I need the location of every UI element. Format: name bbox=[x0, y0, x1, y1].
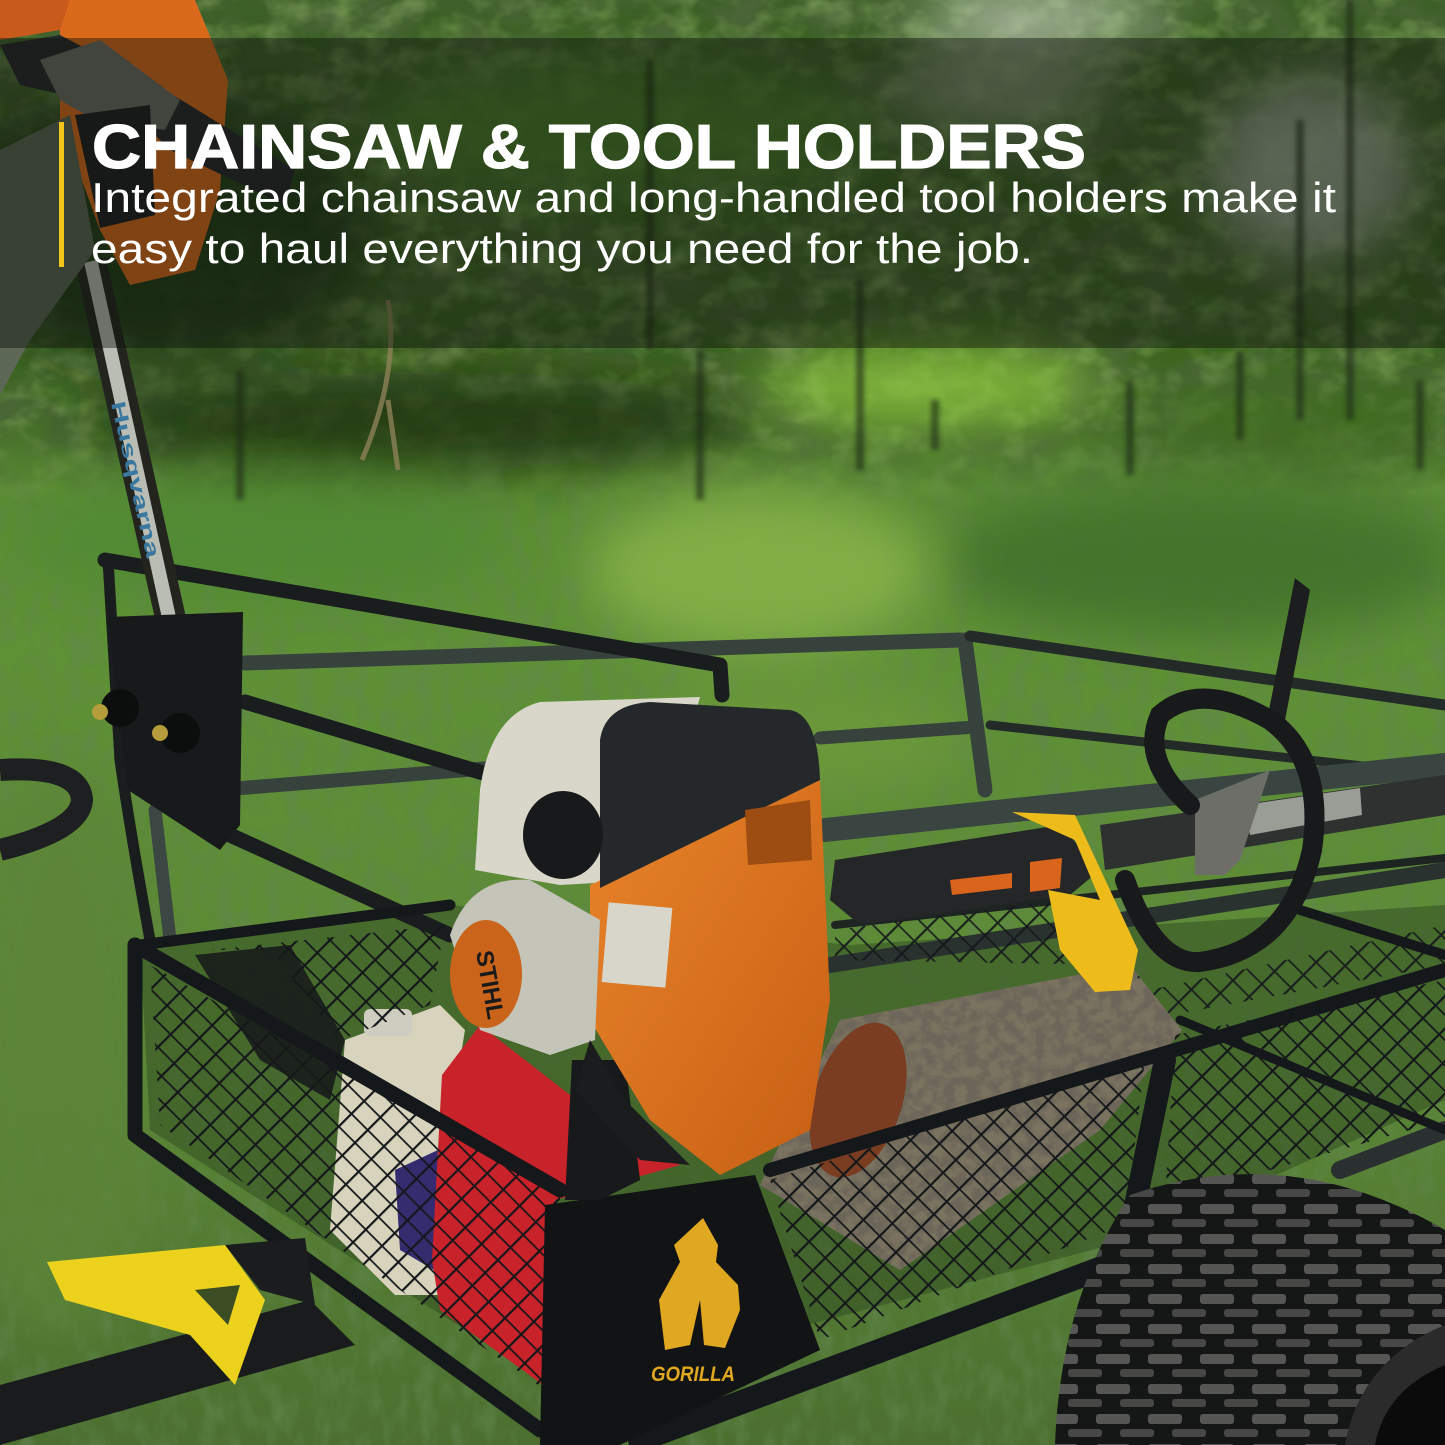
description text: Integrated chainsaw and long-handled tool holders make it bbox=[91, 174, 1336, 221]
heading: CHAINSAW & TOOL HOLDERS bbox=[92, 113, 1086, 182]
gorilla logo corner plate bbox=[540, 1175, 820, 1445]
yellow foot step bbox=[0, 1238, 355, 1445]
fuel jug and red gas can bbox=[330, 1005, 680, 1390]
chainsaw holder plate with knobs bbox=[92, 612, 243, 850]
gorilla logo corner plate: GORILLA bbox=[651, 1363, 735, 1386]
chainsaw and gloved hand at top left bbox=[0, 0, 295, 395]
far side rail of cart bbox=[242, 636, 1445, 965]
description text bbox=[91, 174, 1336, 272]
near side rail and chainsaw holder frame bbox=[105, 560, 722, 940]
cart bed interior shadow bbox=[140, 905, 1445, 1390]
yellow accent bar bbox=[59, 122, 64, 267]
left trimmer handle at edge bbox=[0, 769, 82, 850]
engine head of string trimmer: STIHL bbox=[470, 948, 509, 1021]
engine head of string trimmer bbox=[450, 697, 830, 1200]
cart mesh near and far panels bbox=[150, 900, 1445, 1400]
description text: easy to haul everything you need for the job. bbox=[91, 225, 1033, 272]
translucent banner bbox=[0, 38, 1445, 348]
chainsaw bar in holder bbox=[75, 258, 187, 632]
log in cart bbox=[760, 965, 1182, 1270]
trimmer handle, yellow guard and steering loop bbox=[830, 578, 1445, 992]
cart body frame bbox=[135, 905, 1445, 1440]
tire bbox=[1055, 1174, 1445, 1445]
chainsaw bar in holder: Husqvarna bbox=[106, 399, 164, 561]
